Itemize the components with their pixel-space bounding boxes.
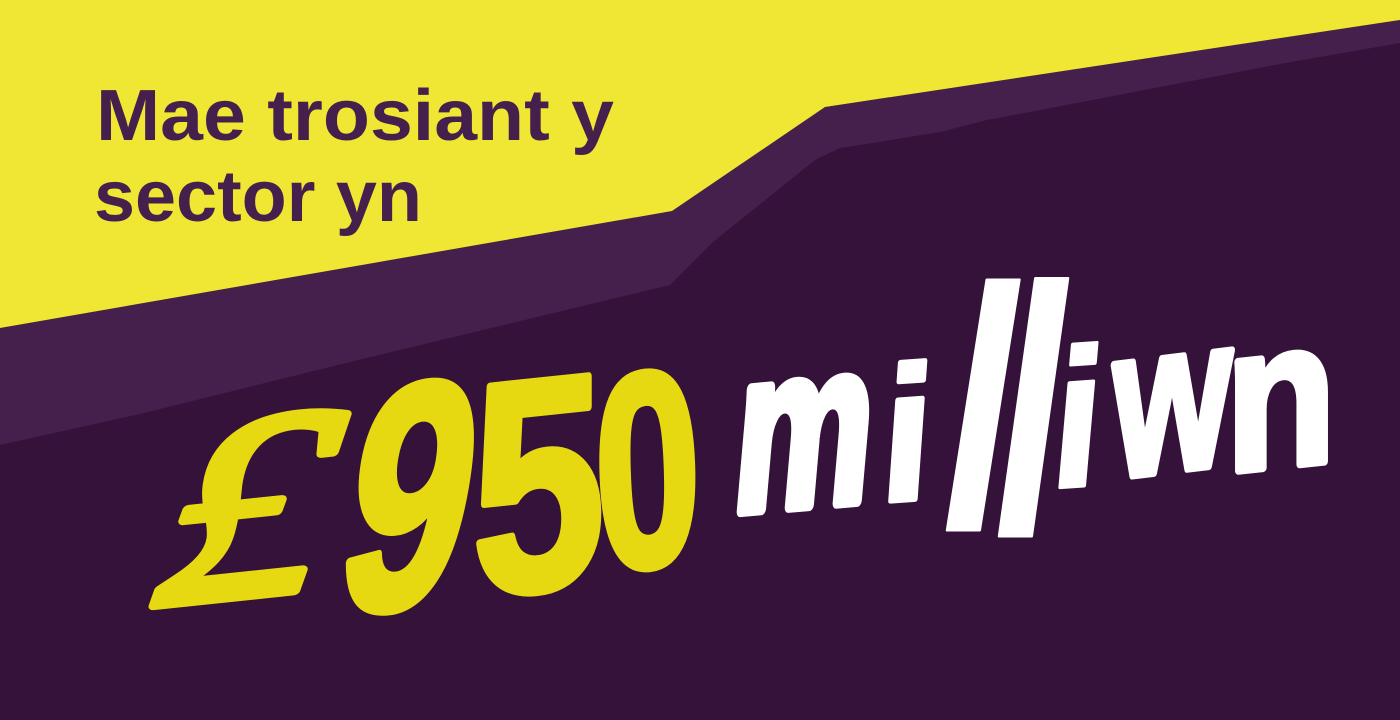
amount: milliwn xyxy=(726,214,1336,612)
amount: £950: 9 xyxy=(318,312,505,681)
amount: milliwn: l xyxy=(971,214,1094,612)
amount: milliwn: i xyxy=(1044,307,1112,530)
panel: mid purple band xyxy=(0,20,1400,445)
amount: milliwn: i xyxy=(875,326,940,543)
heading xyxy=(94,76,614,237)
heading: Mae trosiant y xyxy=(96,76,614,156)
amount: milliwn: m xyxy=(726,292,886,561)
amount: milliwn: n xyxy=(1226,275,1336,517)
amount: £950: 5 xyxy=(472,309,605,660)
amount: milliwn: w xyxy=(1110,271,1234,524)
amount: £950: 0 xyxy=(589,310,706,631)
amount: £950 xyxy=(142,309,706,681)
amount: £950: £ xyxy=(142,347,360,665)
amount: milliwn: l xyxy=(918,217,1047,604)
heading: sector yn xyxy=(94,157,422,237)
panel: yellow header xyxy=(0,0,1400,328)
